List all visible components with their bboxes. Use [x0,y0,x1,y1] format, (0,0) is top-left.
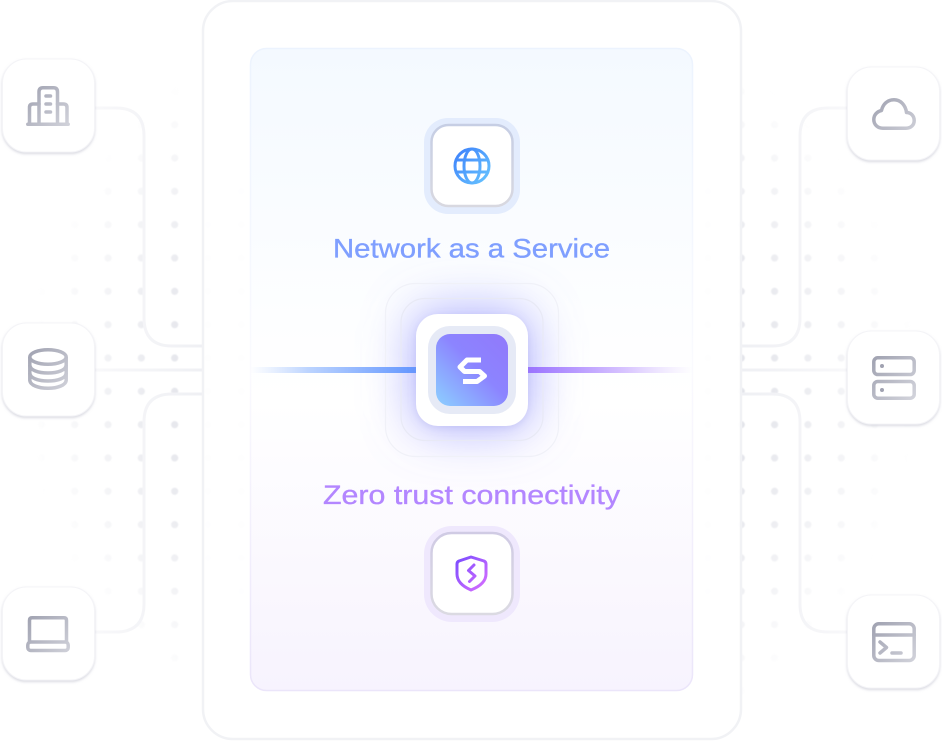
main card [203,1,741,739]
heading: Zero trust connectivity: Zero trust connectivity [323,480,621,510]
device card: laptop [2,587,94,680]
heading: Network as a Service: Network as a Service [333,234,610,264]
icon: shield tile [424,526,520,622]
device card: server [848,331,940,424]
beam: left blue [250,367,416,373]
device card: building [2,59,94,152]
beam: right purple [528,367,693,373]
dotted background pattern [104,155,844,628]
central glow and rings [386,284,558,456]
connector lines: right [741,108,847,632]
device card: database [2,323,94,416]
connector lines: left [95,108,203,632]
icon: globe tile [424,118,520,214]
panel: inner gradient [250,48,692,690]
central logo tile [416,314,528,426]
device card: terminal [848,595,940,688]
device card: cloud [848,67,940,160]
